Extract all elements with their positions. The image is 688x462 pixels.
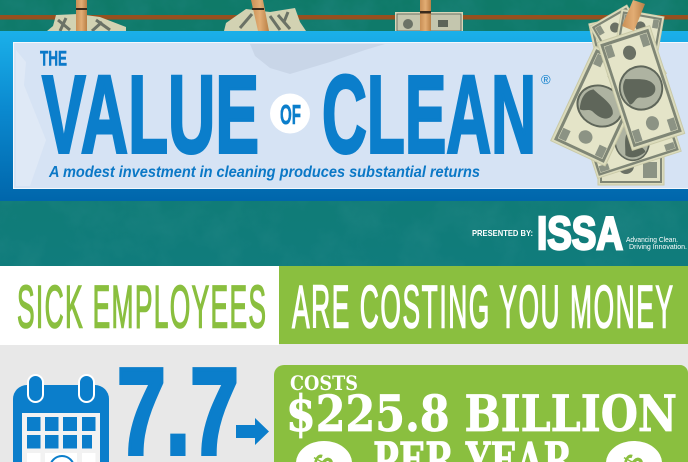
teal textured background — [0, 0, 688, 266]
tagline: A modest investment in cleaning produces substantial returns — [48, 164, 480, 181]
lower gray panel — [0, 345, 688, 462]
clothesline rope — [0, 15, 688, 20]
title circle OF: OF — [280, 99, 301, 130]
ISSA slogan: Advancing Clean. — [626, 235, 678, 244]
ISSA logo: ISSA — [537, 207, 623, 259]
title banner — [0, 31, 688, 201]
hanging bills and clothespins along the line — [47, 0, 463, 31]
registered mark: ® — [541, 72, 551, 87]
section heading band — [0, 266, 688, 345]
bill cluster 3 — [395, 0, 463, 31]
bill cluster 2 — [224, 0, 306, 31]
clothespin on money — [622, 0, 645, 31]
arrow — [236, 418, 269, 445]
presented by credit: PRESENTED BY: — [472, 228, 533, 238]
title word VALUE: VALUE — [42, 54, 259, 176]
title small word THE: THE — [40, 48, 67, 70]
icon: right dollar coin — [606, 441, 662, 462]
green cost panel — [274, 365, 688, 462]
illustration: pile of money with clothespin — [551, 0, 685, 185]
banner inner panel — [14, 42, 688, 188]
icon: calendar — [13, 375, 109, 462]
heading: sick employees: SICK EMPLOYEES — [17, 273, 266, 340]
title circle OF — [270, 94, 310, 134]
bill cluster 1 — [47, 0, 126, 31]
label: costs: COSTS — [290, 371, 358, 395]
heading: are costing you money: ARE COSTING YOU MONEY — [292, 273, 673, 340]
icon: left dollar coin — [296, 441, 352, 462]
